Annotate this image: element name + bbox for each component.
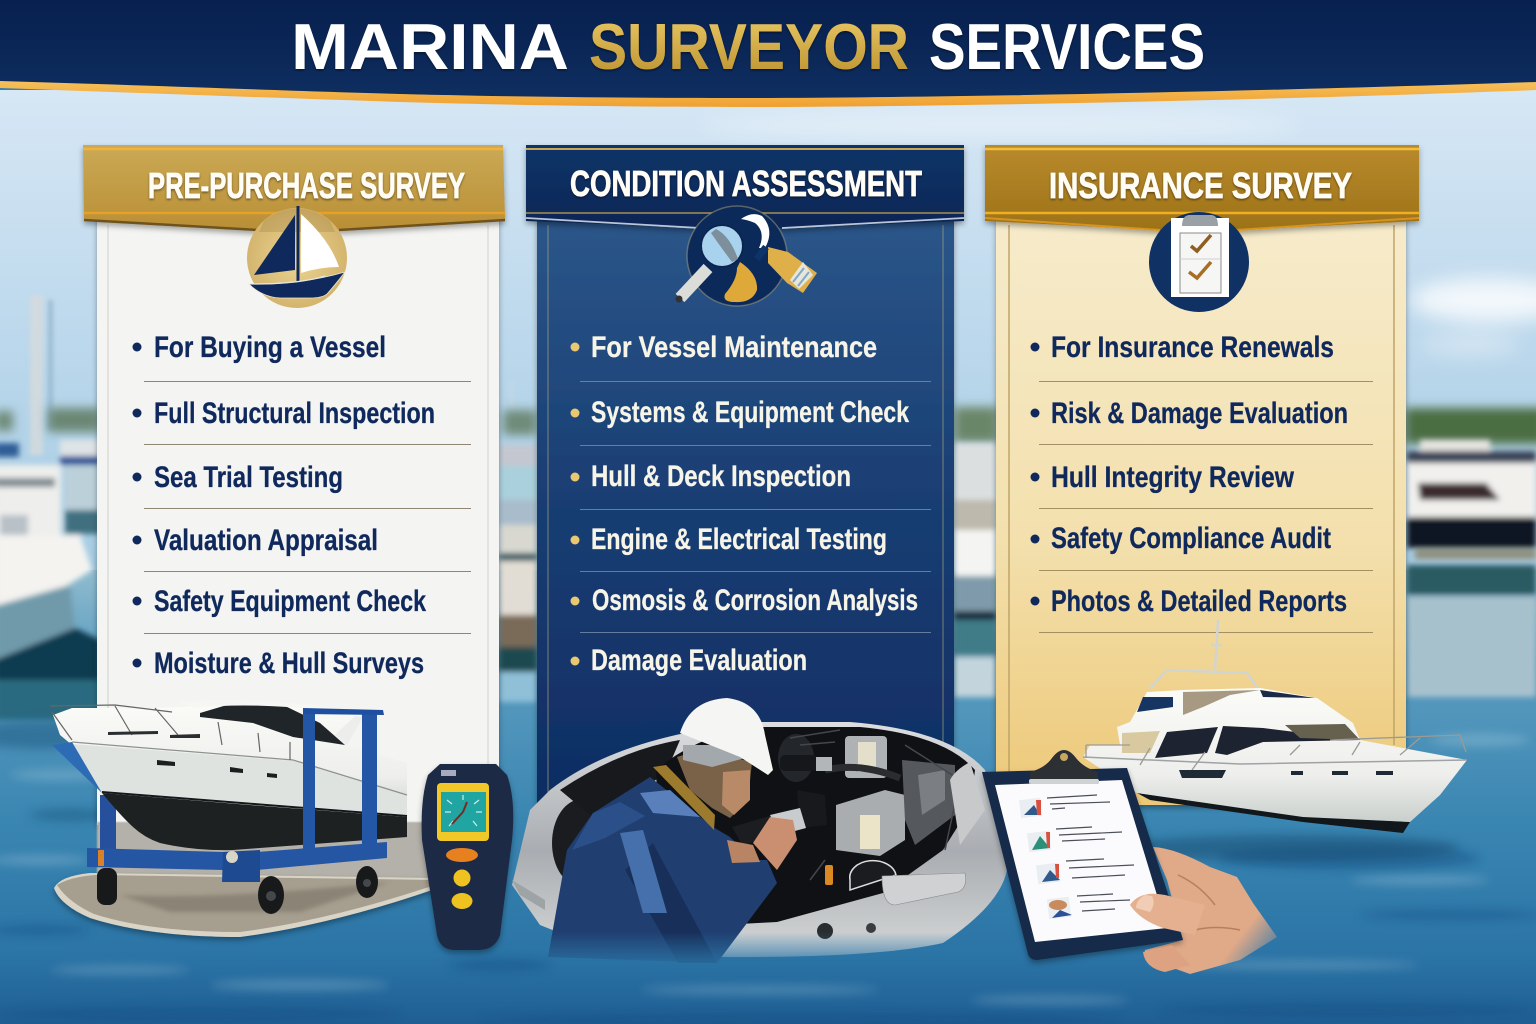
hand	[1145, 847, 1277, 974]
checklist items	[570, 331, 931, 677]
heading banner: CONDITION ASSESSMENT	[570, 163, 922, 204]
gap between centre and right panels	[954, 443, 996, 500]
report charts and lines	[1019, 795, 1134, 919]
title text	[291, 10, 1205, 83]
illustration: clipboard report held in hand	[982, 750, 1277, 974]
icon: sailboat	[247, 206, 347, 308]
heading banner	[526, 145, 964, 228]
illustration: yacht on water	[1083, 620, 1467, 861]
checklist items: Safety Compliance Audit	[1051, 522, 1331, 555]
illustration: boat on travel lift	[50, 700, 432, 937]
panel: insurance survey	[985, 145, 1419, 805]
checklist items: Photos & Detailed Reports	[1051, 585, 1347, 618]
checklist items: Safety Equipment Check	[154, 585, 426, 618]
gap between left and centre panels	[499, 445, 537, 467]
checklist items: Hull & Deck Inspection	[591, 460, 851, 493]
checklist items: Risk & Damage Evaluation	[1051, 397, 1348, 430]
icon: magnifier and tools	[676, 206, 817, 306]
yacht hull and cabin	[50, 700, 407, 850]
checklist items: Full Structural Inspection	[154, 397, 435, 430]
title banner	[0, 0, 1536, 107]
lift wheels	[97, 866, 378, 914]
checklist items: Damage Evaluation	[591, 644, 807, 677]
clipboard board	[982, 768, 1183, 960]
title text: SURVEYOR	[589, 10, 909, 83]
heading banner	[83, 145, 505, 230]
illustration: moisture meter	[422, 764, 513, 950]
heading banner: INSURANCE SURVEY	[1049, 165, 1352, 206]
right marina	[1420, 440, 1490, 452]
clipboard paper	[995, 780, 1167, 942]
stone platform	[54, 873, 432, 937]
checklist items: Sea Trial Testing	[154, 461, 343, 494]
heading banner: PRE-PURCHASE SURVEY	[148, 165, 465, 206]
rear lift column	[100, 795, 116, 860]
checklist items	[1030, 331, 1373, 632]
checklist items: Hull Integrity Review	[1051, 461, 1295, 494]
clipboard metal clip	[1029, 750, 1099, 784]
checklist items: Osmosis & Corrosion Analysis	[592, 584, 918, 617]
checklist items: Engine & Electrical Testing	[591, 523, 887, 556]
title text: MARINA	[291, 10, 569, 83]
icon: checklist clipboard	[1149, 212, 1249, 312]
panel: pre-purchase survey	[83, 145, 505, 880]
checklist items: Valuation Appraisal	[154, 524, 378, 557]
engine interior	[656, 727, 985, 939]
title text: SERVICES	[929, 10, 1205, 83]
illustration: engine bay	[512, 698, 1007, 963]
panel body: cream card	[996, 215, 1406, 805]
heading banner	[985, 145, 1419, 230]
silver housing	[512, 722, 1007, 957]
checklist items: For Buying a Vessel	[154, 331, 386, 364]
checklist items: Systems & Equipment Check	[591, 396, 909, 429]
checklist items: For Vessel Maintenance	[591, 331, 877, 364]
left marina	[0, 443, 19, 457]
checklist items: Moisture & Hull Surveys	[154, 647, 424, 680]
panel: condition assessment	[526, 145, 964, 815]
surveyor with hard hat and flashlight	[548, 698, 827, 963]
thumb and fingers	[1130, 894, 1205, 972]
lift frame	[87, 708, 387, 882]
checklist items: For Insurance Renewals	[1051, 331, 1334, 364]
checklist items	[132, 331, 471, 680]
panel body: white card	[97, 215, 499, 880]
panel body: navy card	[537, 215, 954, 815]
